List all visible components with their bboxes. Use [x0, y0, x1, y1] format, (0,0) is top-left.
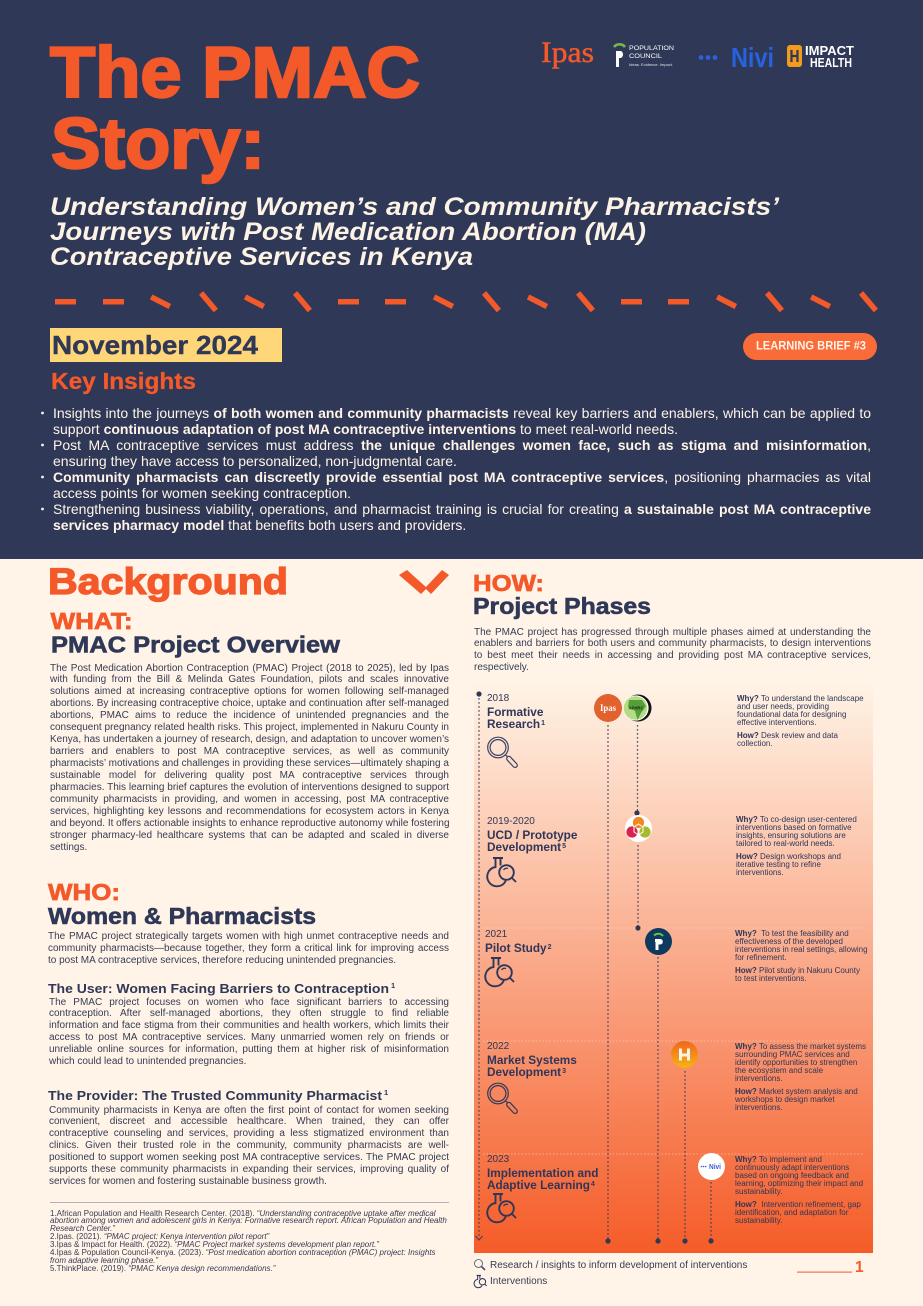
insight text: support continuous adaptation of post MA contraceptive interventions to meet real-world needs. [53, 421, 678, 437]
why and how: 2018: effective interventions. How? Desk review and data [737, 718, 838, 740]
text: the user [49, 996, 449, 1067]
logo: Nivi: Nivi [731, 42, 774, 73]
text: the provider: convenient, discreet and accessible healthcare. When trained, they can offer [49, 1116, 449, 1127]
why and how: 2018: and user needs, providing [737, 702, 829, 710]
why and how: 2022 [735, 1042, 866, 1112]
why and how: 2019-2020: iterative testing to refine [736, 860, 821, 869]
text: the user: information and face stigma from their communities and health workers, which limits their [49, 1020, 449, 1031]
heading: how [473, 570, 651, 620]
text: who intro: The PMAC project strategically targets women with high unmet contraceptive needs and [48, 931, 449, 942]
key insights bullets [41, 405, 871, 533]
subheading: the provider: 1 [384, 1088, 388, 1097]
logo: Nivi [698, 42, 774, 73]
phase 2018 label [487, 692, 545, 730]
subheading: the provider: The Provider: The Trusted Community Pharmacist [48, 1088, 383, 1103]
heading: who [48, 879, 316, 929]
text: the provider: contraceptive counseling and services, providing a less stigmatized environment than [49, 1128, 449, 1139]
why and how: 2019-2020: interventions based on formative [736, 823, 852, 832]
text: how intro: The PMAC project has progressed through multiple phases aimed at understanding the [474, 626, 871, 638]
icon: legend flask [474, 1274, 487, 1288]
text: who intro: to post MA contraceptive services, therefore reducing unintended pregnancies. [48, 955, 396, 966]
heading: how: HOW: [473, 570, 544, 596]
icon: flask [487, 1193, 517, 1223]
learning brief pill [743, 333, 877, 360]
subtitle: Contraceptive Services in Kenya [50, 243, 473, 271]
text: the provider: services for women and fostering sustainable business growth. [49, 1176, 327, 1187]
logo: Population Council [613, 43, 674, 67]
text: the user: which could lead to unintended pregnancies. [49, 1056, 246, 1067]
subheading: the user: 1 [391, 981, 395, 990]
icon: legend magnifier [474, 1258, 486, 1270]
why and how: 2022: interventions. [735, 1102, 783, 1112]
text: project overview: stronger pharmacy-led healthcare systems that can be adapted and scaled in diverse [50, 830, 449, 841]
why and how: 2018: collection. [737, 738, 773, 748]
text: project overview: barriers and enablers to post MA contraceptive services, as well as community [50, 746, 449, 757]
icon: flask [486, 857, 517, 888]
why and how: 2023: Why? To implement and [735, 1154, 822, 1164]
text: the provider: clinics. Given their trusted role in the community, community pharmacists are well- [49, 1140, 449, 1151]
text: project overview: abortions, PMAC aims to reduce the incidence of unintended pregnancies and the [50, 710, 449, 721]
why and how: 2021: to test interventions. [735, 974, 807, 982]
heading: how: Project Phases [473, 593, 651, 619]
page number: 1 [855, 1259, 864, 1276]
phase 2022 label: Market Systems [487, 1052, 577, 1066]
text: project overview: sustainable model for delivering quality post MA contraceptive services through [50, 770, 449, 781]
icon: magnifier [487, 1082, 519, 1114]
why and how: 2019-2020: tailored to real-world needs. How? Design workshops and [736, 839, 841, 861]
phase 2018 label: Research1 [487, 716, 545, 730]
logo: Population Council: Ideas. Evidence. Impact. [629, 63, 673, 67]
text: the provider: positioned to support women seeking post MA contraceptive services. The PMAC project [49, 1152, 449, 1163]
reference list: 3.Ipas & Impact for Health. (2022). “PMAC Project market systems development plan report.” [50, 1240, 379, 1249]
why and how: 2021: effectiveness of the developed [735, 936, 843, 946]
partner logo: Ipas [594, 694, 622, 722]
text: project overview: and beyond. It offers actionable insights to enhance reproductive autonomy while fostering [50, 818, 450, 829]
why and how: 2019-2020: Why? To co-design user-centered [736, 815, 857, 824]
phase 2021 label [485, 928, 552, 954]
partner logo: ThinkPlace [625, 815, 652, 842]
insight text: ensuring they have access to personalized, non-judgmental care. [53, 453, 457, 469]
reference list: Research Center.” [50, 1224, 115, 1233]
text: project overview: consequent pregnancy related health risks. This project, implemented in Nakuru County in [50, 722, 449, 733]
text: project overview: The Post Medication Abortion Contraception (PMAC) Project (2018 to 2025), led by Ipas [50, 662, 449, 674]
heading: what [50, 608, 341, 658]
text: who intro [48, 931, 449, 966]
phase 2022 label: 2022 [487, 1040, 509, 1052]
timeline dotted lines [475, 691, 862, 1244]
phase 2019-2020 label: UCD / Prototype [487, 828, 577, 842]
text: project overview: settings. [50, 842, 87, 853]
phase 2019-2020 label: 2019-2020 [487, 816, 535, 826]
reference list: 4.Ipas & Population Council-Kenya. (2023). “Post medication abortion contraception (PMAC) project: Insights [50, 1248, 436, 1257]
why and how: 2022: the ecosystem and scale [735, 1066, 823, 1074]
text: how intro: to best meet their needs in accessing and providing post MA contraceptive services, [474, 650, 871, 661]
title: Story: [51, 105, 265, 184]
logo: Impact for Health: IMPACT [805, 44, 854, 58]
logo: Impact for Health [787, 44, 854, 70]
text: the provider [49, 1104, 450, 1187]
why and how: 2023: identification, and adaptation for [735, 1208, 848, 1216]
heading: who: WHO: [48, 879, 120, 905]
why and how: 2022: identify opportunities to strengthen [735, 1058, 857, 1066]
text: the user: access to post MA contraceptive services. Many unmarried women rely on friends or [49, 1032, 449, 1043]
legend text: research: Research / insights to inform development of interventions [490, 1260, 747, 1270]
phase 2023 label: 2023 [487, 1154, 509, 1164]
text: project overview: abortions. By increasing contraceptive choice, uptake and continuation after self-managed [50, 698, 449, 709]
logo: Population Council: COUNCIL [629, 53, 662, 60]
heading: who: Women & Pharmacists [48, 903, 316, 929]
why and how: 2023 [735, 1156, 863, 1224]
text: the user: contraception. After self-managed abortions, they often struggle to find reliable [49, 1008, 449, 1019]
logo: Population Council: POPULATION [629, 45, 674, 52]
partner logo: Population Council [645, 928, 672, 955]
insight text: services pharmacy model that benefits both users and providers. [53, 517, 466, 533]
why and how: 2022: workshops to design market [735, 1094, 835, 1104]
why and how: 2023: sustainability. [735, 1216, 782, 1224]
partner logo: APHRC [624, 694, 652, 722]
text: how intro: enablers and barriers for both users and community pharmacists, to design interventions [474, 638, 871, 649]
reference list: 1.African Population and Health Research Center. (2018). “Understanding contraceptive uptake after medical [50, 1208, 436, 1218]
icon: flask [484, 957, 515, 988]
why and how: 2018: foundational data for designing [737, 710, 846, 718]
insight text [53, 405, 871, 533]
text: who intro: community pharmacists—because together, they form a critical link for improving access [48, 943, 449, 954]
logo: Ipas: Ipas [541, 36, 594, 69]
heading: what: WHAT: [50, 608, 132, 634]
text: project overview: solutions aimed at increasing contraceptive options for women following self-managed [50, 686, 449, 697]
phase 2019-2020 label: Development5 [487, 840, 566, 854]
text: project overview: community pharmacists in providing, and women in accessing, post MA contraceptive [50, 794, 449, 805]
heading: background: Background [48, 560, 288, 602]
why and how: 2019-2020: interventions. [736, 868, 784, 877]
why and how: 2021: interventions in real settings, allowing [735, 944, 868, 954]
text: project overview: services, highlighting key lessons and recommendations for ecosystem actors in Kenya [50, 806, 449, 817]
why and how: 2023: based on ongoing feedback and [735, 1170, 849, 1180]
why and how: 2023: learning, optimizing their impact and [735, 1178, 863, 1188]
insight text: Community pharmacists can discreetly provide essential post MA contraceptive services, positioning pharmacies as vital [53, 469, 871, 485]
partner logo: Ipas: Ipas [600, 703, 616, 713]
phase 2023 label: Implementation and [487, 1166, 598, 1180]
why and how: 2023: continuously adapt interventions [735, 1162, 849, 1172]
panel: project phases timeline [474, 680, 873, 1253]
why and how: 2022: interventions. How? Market system analysis and [735, 1074, 858, 1096]
date badge: November 2024 [52, 330, 259, 360]
subtitle: Understanding Women’s and Community Pharmacists’ [50, 193, 780, 221]
partner logo: Nivi: Nivi [709, 1162, 721, 1171]
icon: magnifier [487, 736, 518, 768]
text: project overview: Kenya, has undertaken a journey of research, design, and adaptation to uncover women’s [50, 734, 449, 745]
page number [797, 1258, 865, 1274]
panel: navy header [0, 0, 923, 559]
title: The PMAC [50, 34, 420, 113]
bullet markers [41, 412, 44, 510]
insight text: Strengthening business viability, operations, and pharmacist training is crucial for creating a sustainable post MA contraceptive [53, 501, 871, 517]
text: project overview: pharmacies. This learning brief captures the evolution of interventions designed to support [50, 782, 449, 793]
phase 2018 label: 2018 [487, 692, 509, 704]
why and how: 2022: surrounding PMAC services and [735, 1050, 850, 1058]
partner logo: Impact for Health [671, 1041, 698, 1068]
subtitle: Journeys with Post Medication Abortion (MA) [50, 218, 646, 246]
text: project overview [50, 662, 450, 853]
phase 2019-2020 label [487, 816, 577, 854]
why and how: 2018 [737, 694, 864, 748]
legend text: interventions: Interventions [490, 1276, 547, 1287]
text: the provider: supports these community pharmacists in expanding their services, improving quality of [49, 1164, 449, 1175]
heading: what: PMAC Project Overview [51, 632, 341, 658]
partner logos [541, 36, 854, 73]
why and how: 2021: for refinement. How? Pilot study in Nakuru County [735, 952, 860, 974]
reference list: 2.Ipas. (2021). “PMAC project: Kenya intervention pilot report” [50, 1232, 269, 1241]
text: the user: unreliable online sources for information, putting them at higher risk of misinformation [49, 1044, 449, 1055]
reference list: abortion among women and adolescent girls in Kenya: Formative research report. African Population and Health [50, 1216, 447, 1225]
heading: key insights: Key Insights [51, 368, 196, 394]
text: how intro: respectively. [474, 662, 529, 673]
why and how: 2018: Why? To understand the landscape [737, 694, 864, 702]
subtitle [50, 193, 780, 271]
why and how: 2021: Why? To test the feasibility and [735, 928, 849, 938]
references [50, 1202, 449, 1273]
reference list [50, 1208, 447, 1273]
reference list: 5.ThinkPlace. (2019). “PMAC Kenya design recommendations.” [50, 1264, 275, 1273]
text: how intro [474, 626, 871, 673]
why and how: 2019-2020 [736, 815, 857, 877]
insight text: Insights into the journeys of both women and community pharmacists reveal key barriers and enablers, which can be applied to [53, 405, 871, 421]
phase 2022 label [487, 1040, 577, 1078]
why and how: 2023: sustainability. How? Intervention refinement, gap [735, 1186, 861, 1208]
reference list: from adaptive learning phase.” [50, 1256, 158, 1265]
insight text: Post MA contraceptive services must address the unique challenges women face, such as stigma and misinformation, [53, 437, 871, 453]
title [50, 34, 420, 184]
phase 2022 label: Development3 [487, 1064, 566, 1078]
text: the user: The PMAC project focuses on women who face significant barriers to accessing [49, 996, 449, 1008]
text: project overview: pharmacists’ motivations and challenges in providing these services—ultimately shaping a [50, 758, 449, 769]
learning brief pill: LEARNING BRIEF #3 [756, 340, 866, 352]
phase 2021 label: 2021 [485, 928, 507, 940]
legend [474, 1257, 754, 1290]
subheading: the user: The User: Women Facing Barriers to Contraception [48, 981, 389, 996]
dashed decorative divider [55, 291, 878, 312]
partner logo: Nivi [698, 1153, 725, 1180]
logo: Impact for Health: HEALTH [810, 56, 852, 70]
insight text: access points for women seeking contraception. [53, 485, 351, 501]
why and how: 2021 [735, 930, 868, 982]
why and how: 2022: Why? To assess the market systems [735, 1042, 866, 1050]
why and how: 2019-2020: insights, ensuring solutions are [736, 831, 846, 840]
icon: chevron mark [399, 570, 449, 594]
text: project overview: with funding from the Bill & Melinda Gates Foundation, pilots and scales innovative [50, 674, 449, 685]
phase 2018 label: Formative [487, 704, 543, 718]
phase 2023 label [487, 1154, 598, 1190]
partner logo: APHRC: APHRC [628, 706, 644, 712]
phase 2021 label: Pilot Study2 [485, 940, 552, 954]
phase 2023 label: Adaptive Learning4 [487, 1178, 595, 1192]
text: the provider: Community pharmacists in Kenya are often the first point of contact for women seeking [49, 1104, 449, 1116]
